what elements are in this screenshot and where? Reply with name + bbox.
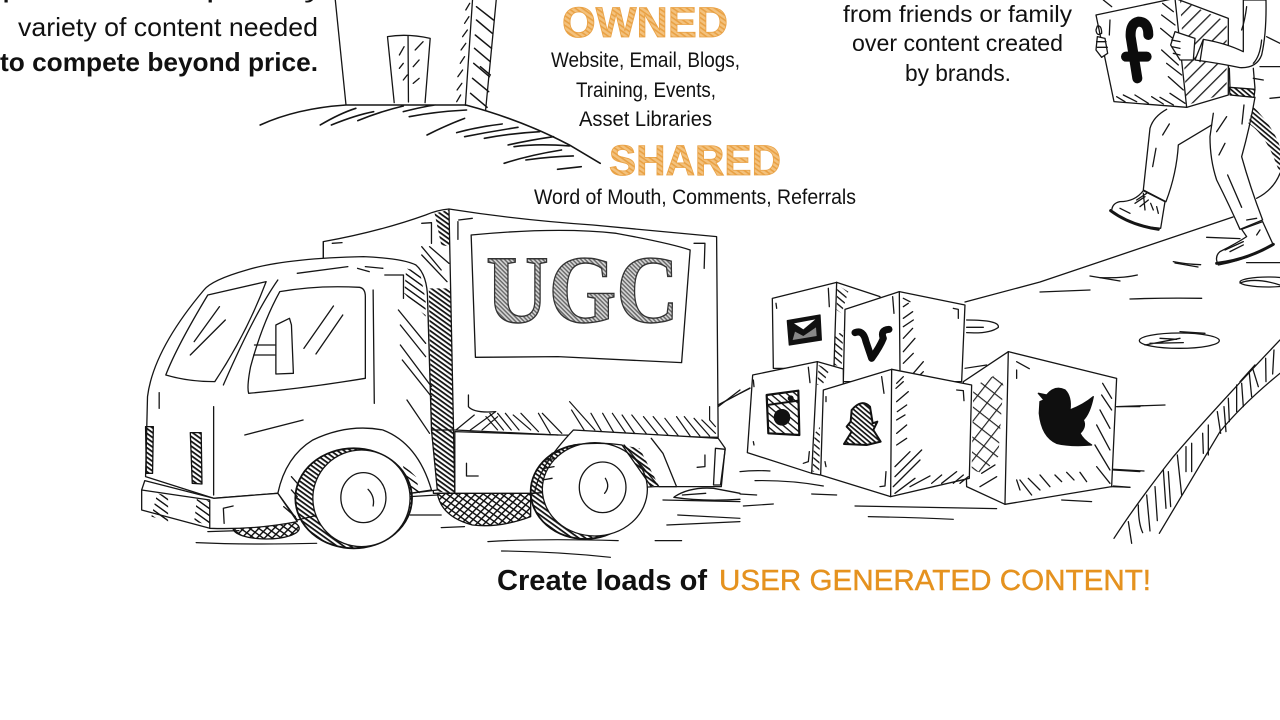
cube: vimeo [843,292,965,382]
text block: owned list: Website, Email, Blogs, [551,49,740,72]
side window [248,287,365,393]
belt [1229,87,1255,97]
icon: snapchat [844,403,881,445]
text block: owned list: Asset Libraries [579,108,712,131]
rear cargo box [323,209,740,493]
box lower hatching [456,402,715,436]
front leg [1143,109,1212,202]
text block: owned list [551,49,740,131]
bottom headline [497,565,1151,597]
puddle behind cubes [967,320,998,333]
bottom headline: USER GENERATED CONTENT! [719,565,1151,597]
cube: twitter [963,352,1117,504]
rear wheel [466,430,725,539]
text block: top right caption: over content created [852,30,1063,56]
text block: top right caption: from friends or family [843,1,1073,27]
text block: owned list: Training, Events, [576,79,716,102]
UGC truck [142,209,740,557]
road lower edge with kerb hatching [1100,262,1280,543]
windshield [166,280,278,385]
cube: snapchat [821,369,972,497]
text block: top left caption: variety of content needed [18,12,318,42]
hands [1096,37,1108,57]
front wheel arch [278,428,431,520]
puddle on road [1139,333,1219,348]
side marker [190,433,202,484]
text block: top left caption: to compete beyond price. [0,47,318,77]
UGC panel on box [471,230,690,363]
front wheel [295,448,420,548]
arm over box [1195,0,1266,68]
back shoe [1112,191,1165,228]
heading: shared: SHARED [609,137,781,185]
hill outline and shading [260,105,600,169]
ground lines around cubes [740,365,1140,519]
road upper edge [718,217,1233,405]
person carrying facebook box [1096,0,1280,265]
bottom headline: Create loads of [497,565,707,597]
building side hatch [471,7,493,107]
front bumper [142,477,297,529]
social media cubes [740,282,1140,519]
building on hill [260,0,600,169]
UGC logo text on truck: UGC [486,236,679,343]
icon: instagram [767,391,799,435]
facebook icon [1126,22,1148,78]
dark underside shadows [233,493,531,539]
icon: vimeo [855,329,889,358]
heading: owned: OWNED [562,0,728,47]
road [718,217,1280,543]
road dashes [1100,262,1202,487]
background tail shape [1248,37,1280,198]
torso [1229,68,1255,88]
headlight strip [146,427,153,473]
text block: top right caption: by brands. [905,60,1011,86]
truck cab [146,257,437,498]
text block: shared list: Word of Mouth, Comments, Referrals [534,186,856,209]
cube: email [772,282,880,370]
building door [387,35,430,103]
front shoe [1216,222,1273,265]
rear leg [1210,97,1263,229]
icon: email [787,315,821,345]
truck puddle [674,488,740,500]
ground lines under truck [196,495,740,557]
side mirror [254,318,293,374]
small road dashes [1040,263,1280,292]
facebook box [1096,0,1228,107]
building walls [335,0,496,111]
icon: twitter [1038,388,1093,446]
text block: top left caption [0,0,394,77]
text block: top right caption [843,1,1073,86]
cube: instagram [747,362,843,475]
